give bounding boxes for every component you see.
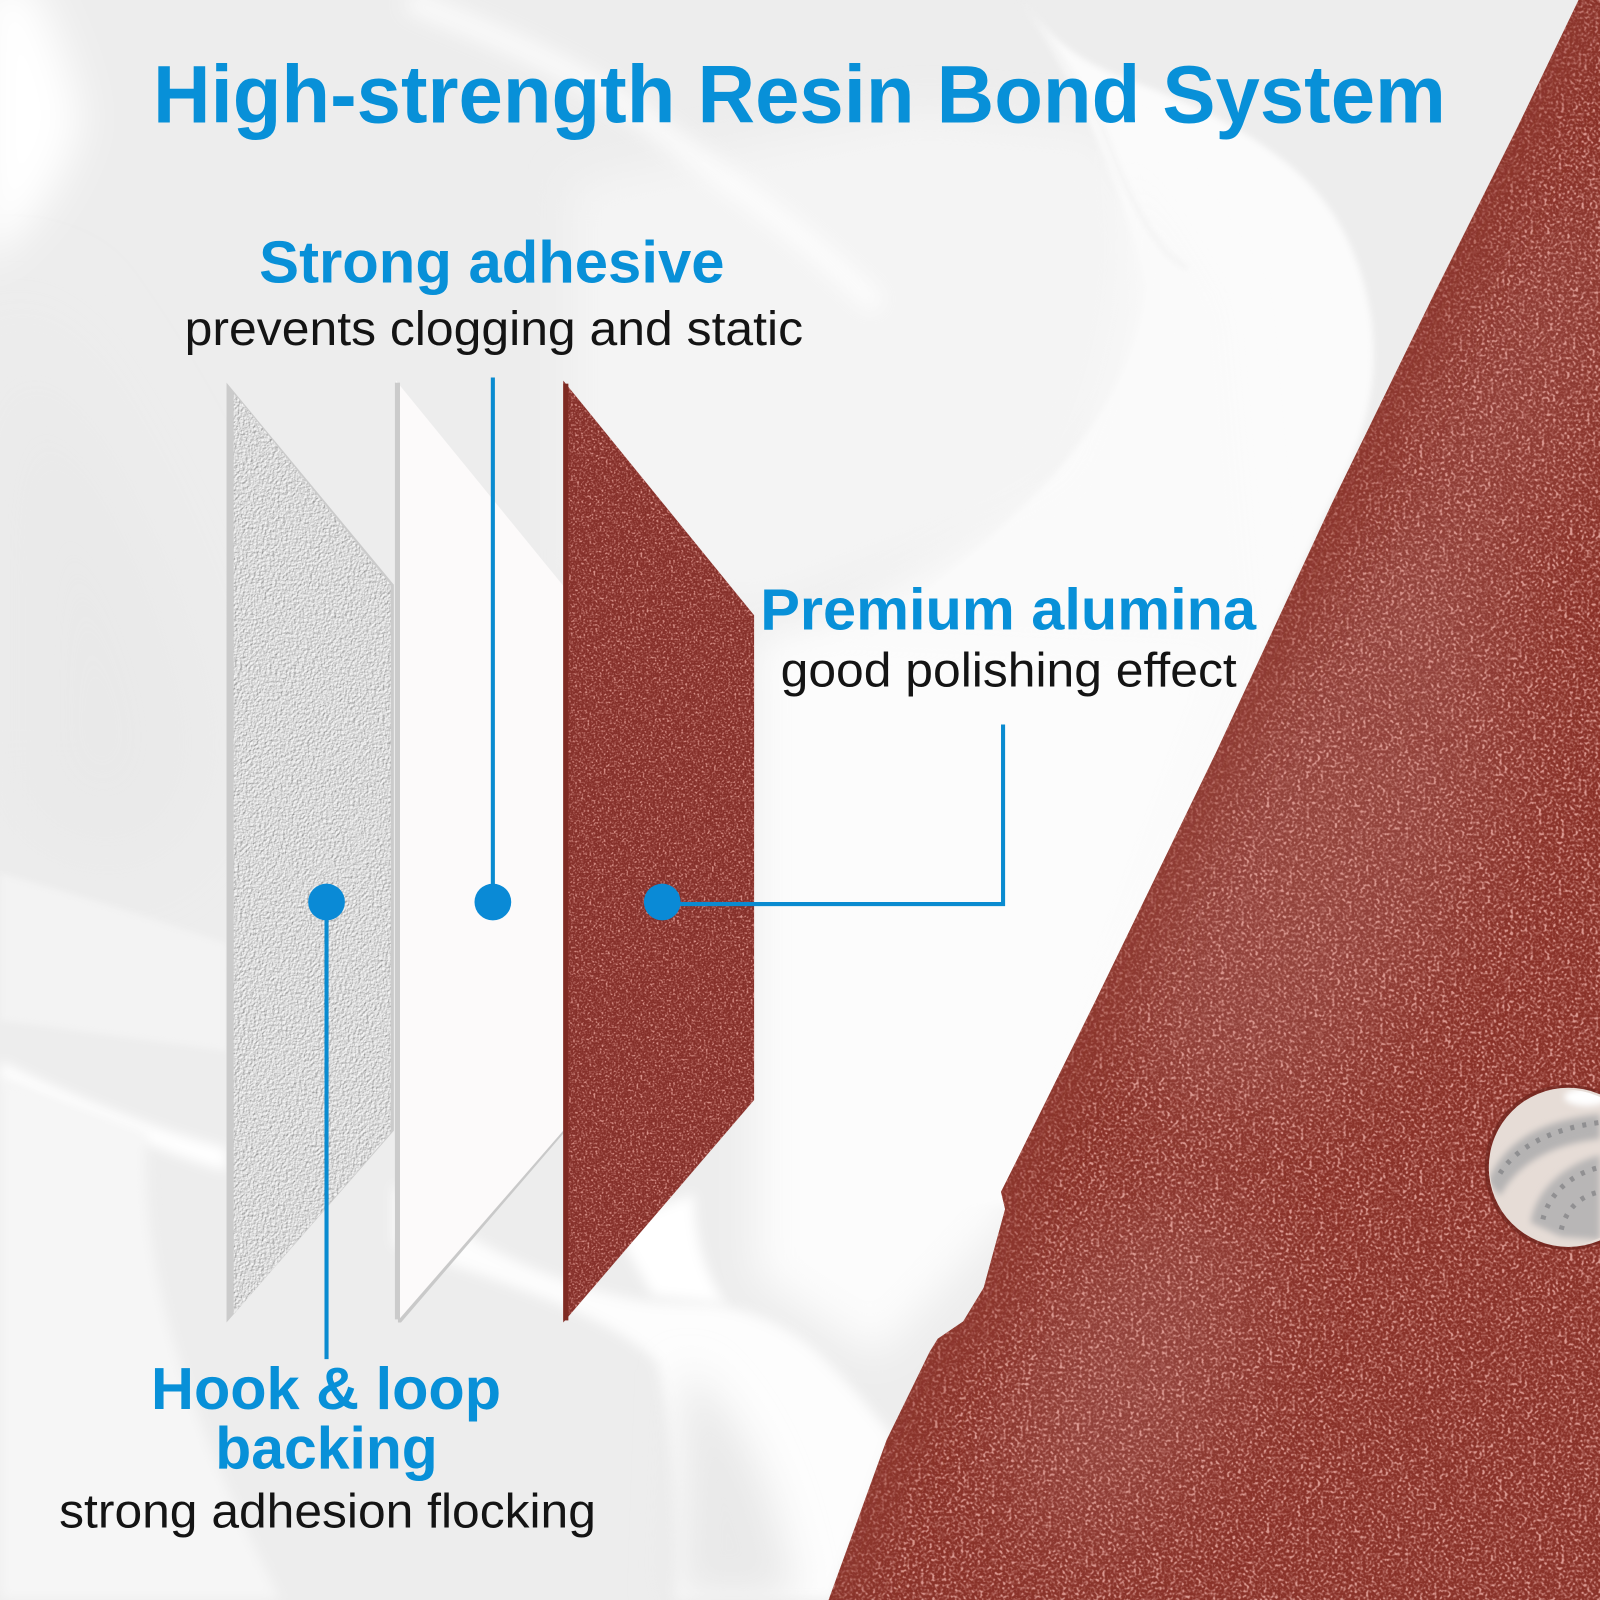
connector: adhesive dot and line — [474, 378, 511, 920]
panel: layer diagram — [227, 381, 754, 1322]
sandpaper product close-up — [816, 0, 1600, 1600]
heading: premium alumina: Premium alumina — [760, 578, 1257, 643]
callout: hook and loop backing — [59, 1355, 596, 1539]
title: High-strength Resin Bond System — [153, 49, 1446, 140]
callout: strong adhesive — [185, 229, 803, 356]
layer: premium alumina (red) — [563, 381, 754, 1322]
callout: premium alumina — [760, 578, 1257, 698]
icon: sandpaper dust hole — [1485, 1085, 1600, 1250]
layer: hook and loop backing (grey) — [227, 383, 394, 1322]
heading: strong adhesive: Strong adhesive — [259, 229, 724, 296]
heading: hook and loop backing: Hook & loop — [151, 1355, 501, 1422]
connector: backing dot and line — [308, 884, 345, 1359]
text: good polishing effect: good polishing effect — [781, 645, 1237, 698]
text: prevents clogging and static: prevents clogging and static — [185, 303, 803, 356]
text: strong adhesion flocking: strong adhesion flocking — [59, 1486, 596, 1539]
heading: hook and loop backing: backing — [215, 1414, 438, 1481]
connector: alumina dot and elbow line — [644, 724, 1003, 920]
layer: adhesive (white) — [395, 381, 563, 1322]
